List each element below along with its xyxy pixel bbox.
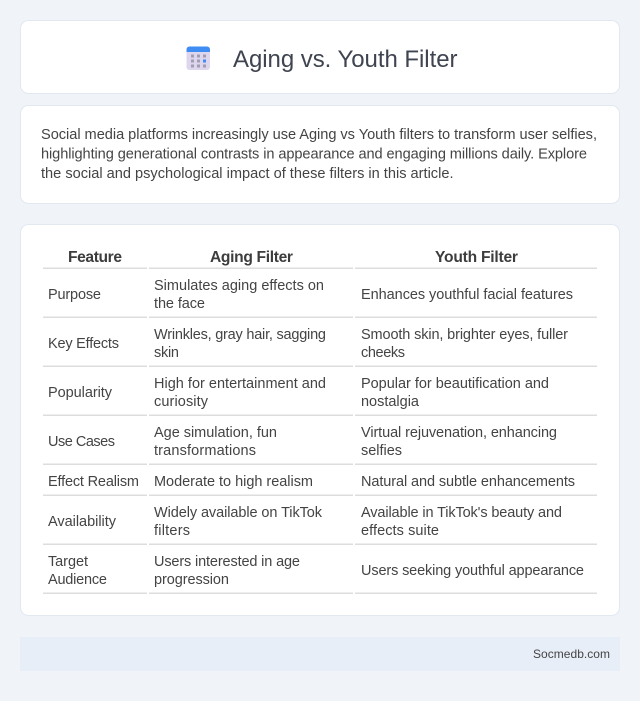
panel: title card [20, 20, 620, 94]
row: availability: Widely available on TikTok [154, 505, 323, 521]
panel: introduction [20, 106, 620, 204]
row: use cases: Virtual rejuvenation, enhancing [361, 425, 557, 441]
row: purpose [48, 278, 573, 312]
footer: Socmedb.com [533, 647, 610, 661]
row: availability: Available in TikTok's beauty and [361, 505, 562, 521]
intro text: Social media platforms increasingly use Aging vs Youth filters to transform user selfies, [41, 127, 597, 143]
row: use cases [48, 425, 557, 459]
row: target audience: Users interested in age [154, 554, 300, 570]
row: availability: filters [154, 523, 190, 539]
row: target audience: progression [154, 572, 229, 588]
table header: Feature [68, 249, 122, 266]
row: popularity [48, 376, 549, 410]
row: target audience [48, 554, 584, 588]
row: target audience: Target [48, 554, 88, 570]
title: Aging vs. Youth Filter [233, 46, 458, 73]
row: availability: effects suite [361, 523, 439, 539]
row: popularity: High for entertainment and [154, 376, 326, 392]
table header [68, 249, 518, 266]
row: effect realism [48, 474, 575, 490]
row: target audience: Users seeking youthful appearance [361, 563, 584, 579]
row: use cases: Age simulation, fun [154, 425, 277, 441]
intro text: highlighting generational contrasts in appearance and engaging millions daily. Explore [41, 146, 587, 162]
row: key effects: cheeks [361, 345, 405, 361]
table header: Youth Filter [435, 249, 518, 266]
row: key effects: Smooth skin, brighter eyes, fuller [361, 327, 568, 343]
row: availability [48, 505, 562, 539]
row: use cases: selfies [361, 443, 402, 459]
row: effect realism: Natural and subtle enhancements [361, 474, 575, 490]
row: effect realism: Moderate to high realism [154, 474, 313, 490]
row: popularity: curiosity [154, 394, 209, 410]
intro text [41, 127, 597, 182]
row: key effects: skin [154, 345, 179, 361]
panel: comparison table [20, 224, 620, 616]
row: effect realism: Effect Realism [48, 474, 139, 490]
row: availability: Availability [48, 514, 117, 530]
row: key effects: Key Effects [48, 336, 119, 352]
icon: calendar [186, 46, 210, 70]
footer [20, 637, 620, 671]
row: key effects: Wrinkles, gray hair, sagging [154, 327, 326, 343]
row: purpose: Simulates aging effects on [154, 278, 324, 294]
row: purpose: Enhances youthful facial features [361, 287, 573, 303]
row: popularity: Popularity [48, 385, 113, 401]
row: use cases: transformations [154, 443, 256, 459]
row: key effects [48, 327, 568, 361]
row: purpose: the face [154, 296, 205, 312]
row: popularity: nostalgia [361, 394, 420, 410]
intro text: the social and psychological impact of these filters in this article. [41, 166, 454, 182]
row: purpose: Purpose [48, 287, 101, 303]
row: target audience: Audience [48, 572, 107, 588]
table rules [43, 268, 597, 594]
row: use cases: Use Cases [48, 434, 115, 450]
table header: Aging Filter [210, 249, 293, 266]
row: popularity: Popular for beautification and [361, 376, 549, 392]
